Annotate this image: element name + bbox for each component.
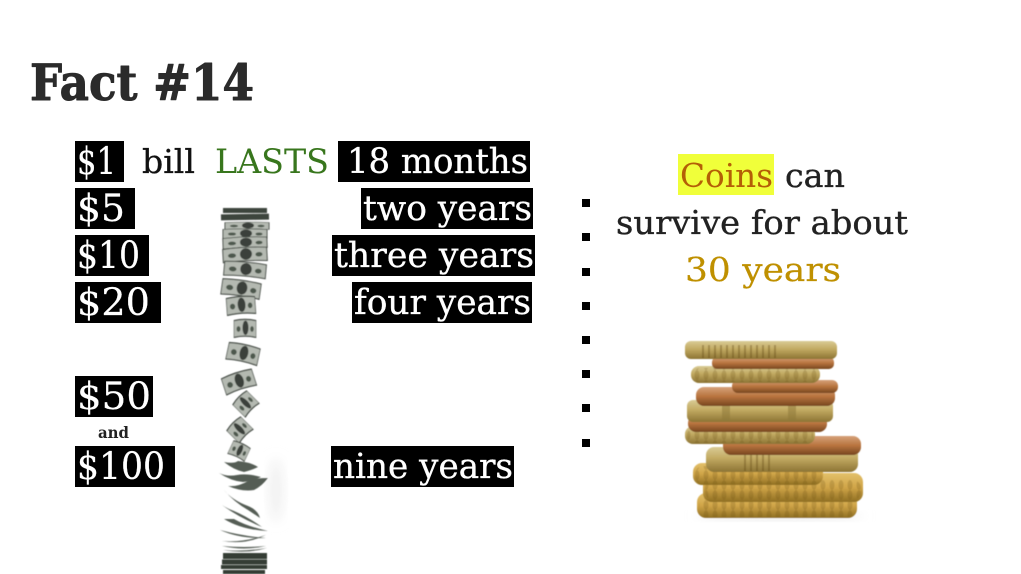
and text: and — [98, 423, 129, 442]
bullet dots — [582, 199, 590, 447]
coins highlight word: Coins — [680, 156, 773, 195]
18 months: 18 months — [347, 142, 528, 182]
bill text: bill — [142, 142, 195, 181]
$10 label: $10 — [77, 234, 140, 277]
nine years: nine years — [333, 447, 513, 487]
title: Fact #14 — [30, 53, 254, 112]
30 years: 30 years — [685, 250, 841, 289]
$5 label: $5 — [77, 187, 125, 230]
$20 label: $20 — [77, 281, 150, 324]
$100 label: $100 — [77, 445, 165, 488]
$50 label: $50 — [77, 375, 151, 418]
two years: two years — [363, 189, 532, 229]
icon: coin stack — [685, 341, 865, 519]
survive for about: survive for about — [616, 203, 908, 242]
three years: three years — [334, 236, 534, 276]
$1 label: $1 — [77, 140, 116, 183]
panel: bill lifespans — [75, 140, 535, 488]
can text: can — [785, 156, 845, 195]
four years: four years — [354, 283, 531, 323]
panel: coins text — [616, 154, 908, 289]
icon: falling money column — [219, 208, 282, 574]
lasts text: LASTS — [215, 142, 329, 182]
